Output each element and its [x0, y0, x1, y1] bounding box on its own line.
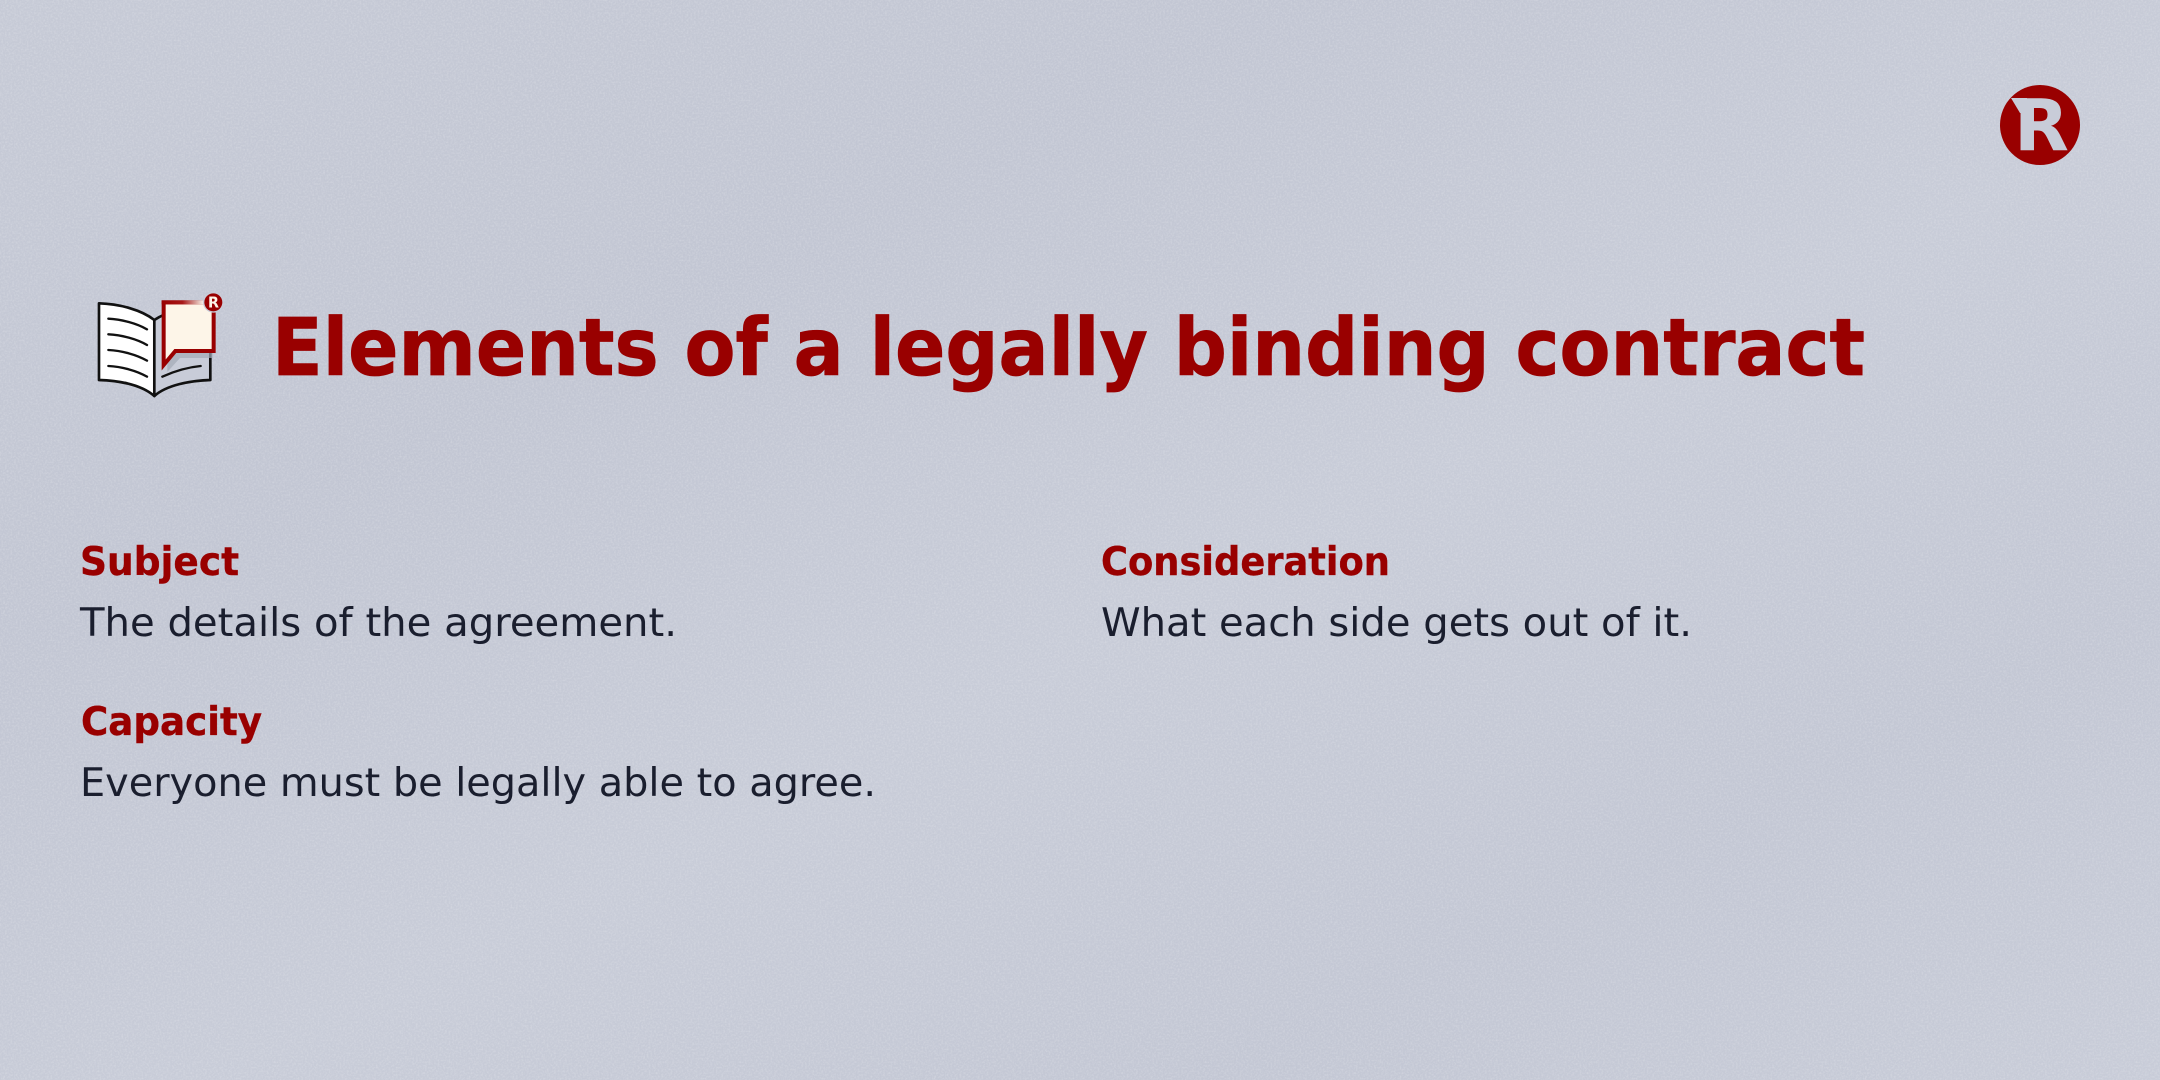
- icon: open book with speech bubble: [99, 292, 224, 396]
- text: Subject description: The details of the agreement.: [79, 601, 677, 646]
- text: Capacity description: Everyone must be legally able to agree.: [80, 761, 876, 806]
- logo: R badge: [2000, 84, 2080, 167]
- item: Subject: [79, 540, 677, 646]
- icon: book pages: [99, 303, 210, 396]
- icon: small R badge: R: [208, 294, 219, 312]
- logo: R badge: R: [2014, 84, 2069, 167]
- title: Elements of a legally binding contract: [272, 302, 1865, 394]
- item: Consideration: [1101, 540, 1692, 646]
- item: Capacity: [80, 700, 876, 806]
- heading: Subject: Subject: [80, 540, 239, 585]
- text: Consideration description: What each side gets out of it.: [1101, 601, 1692, 646]
- icon: speech bubble: [162, 300, 217, 372]
- heading: Consideration: Consideration: [1101, 540, 1390, 585]
- heading: Capacity: Capacity: [81, 700, 262, 745]
